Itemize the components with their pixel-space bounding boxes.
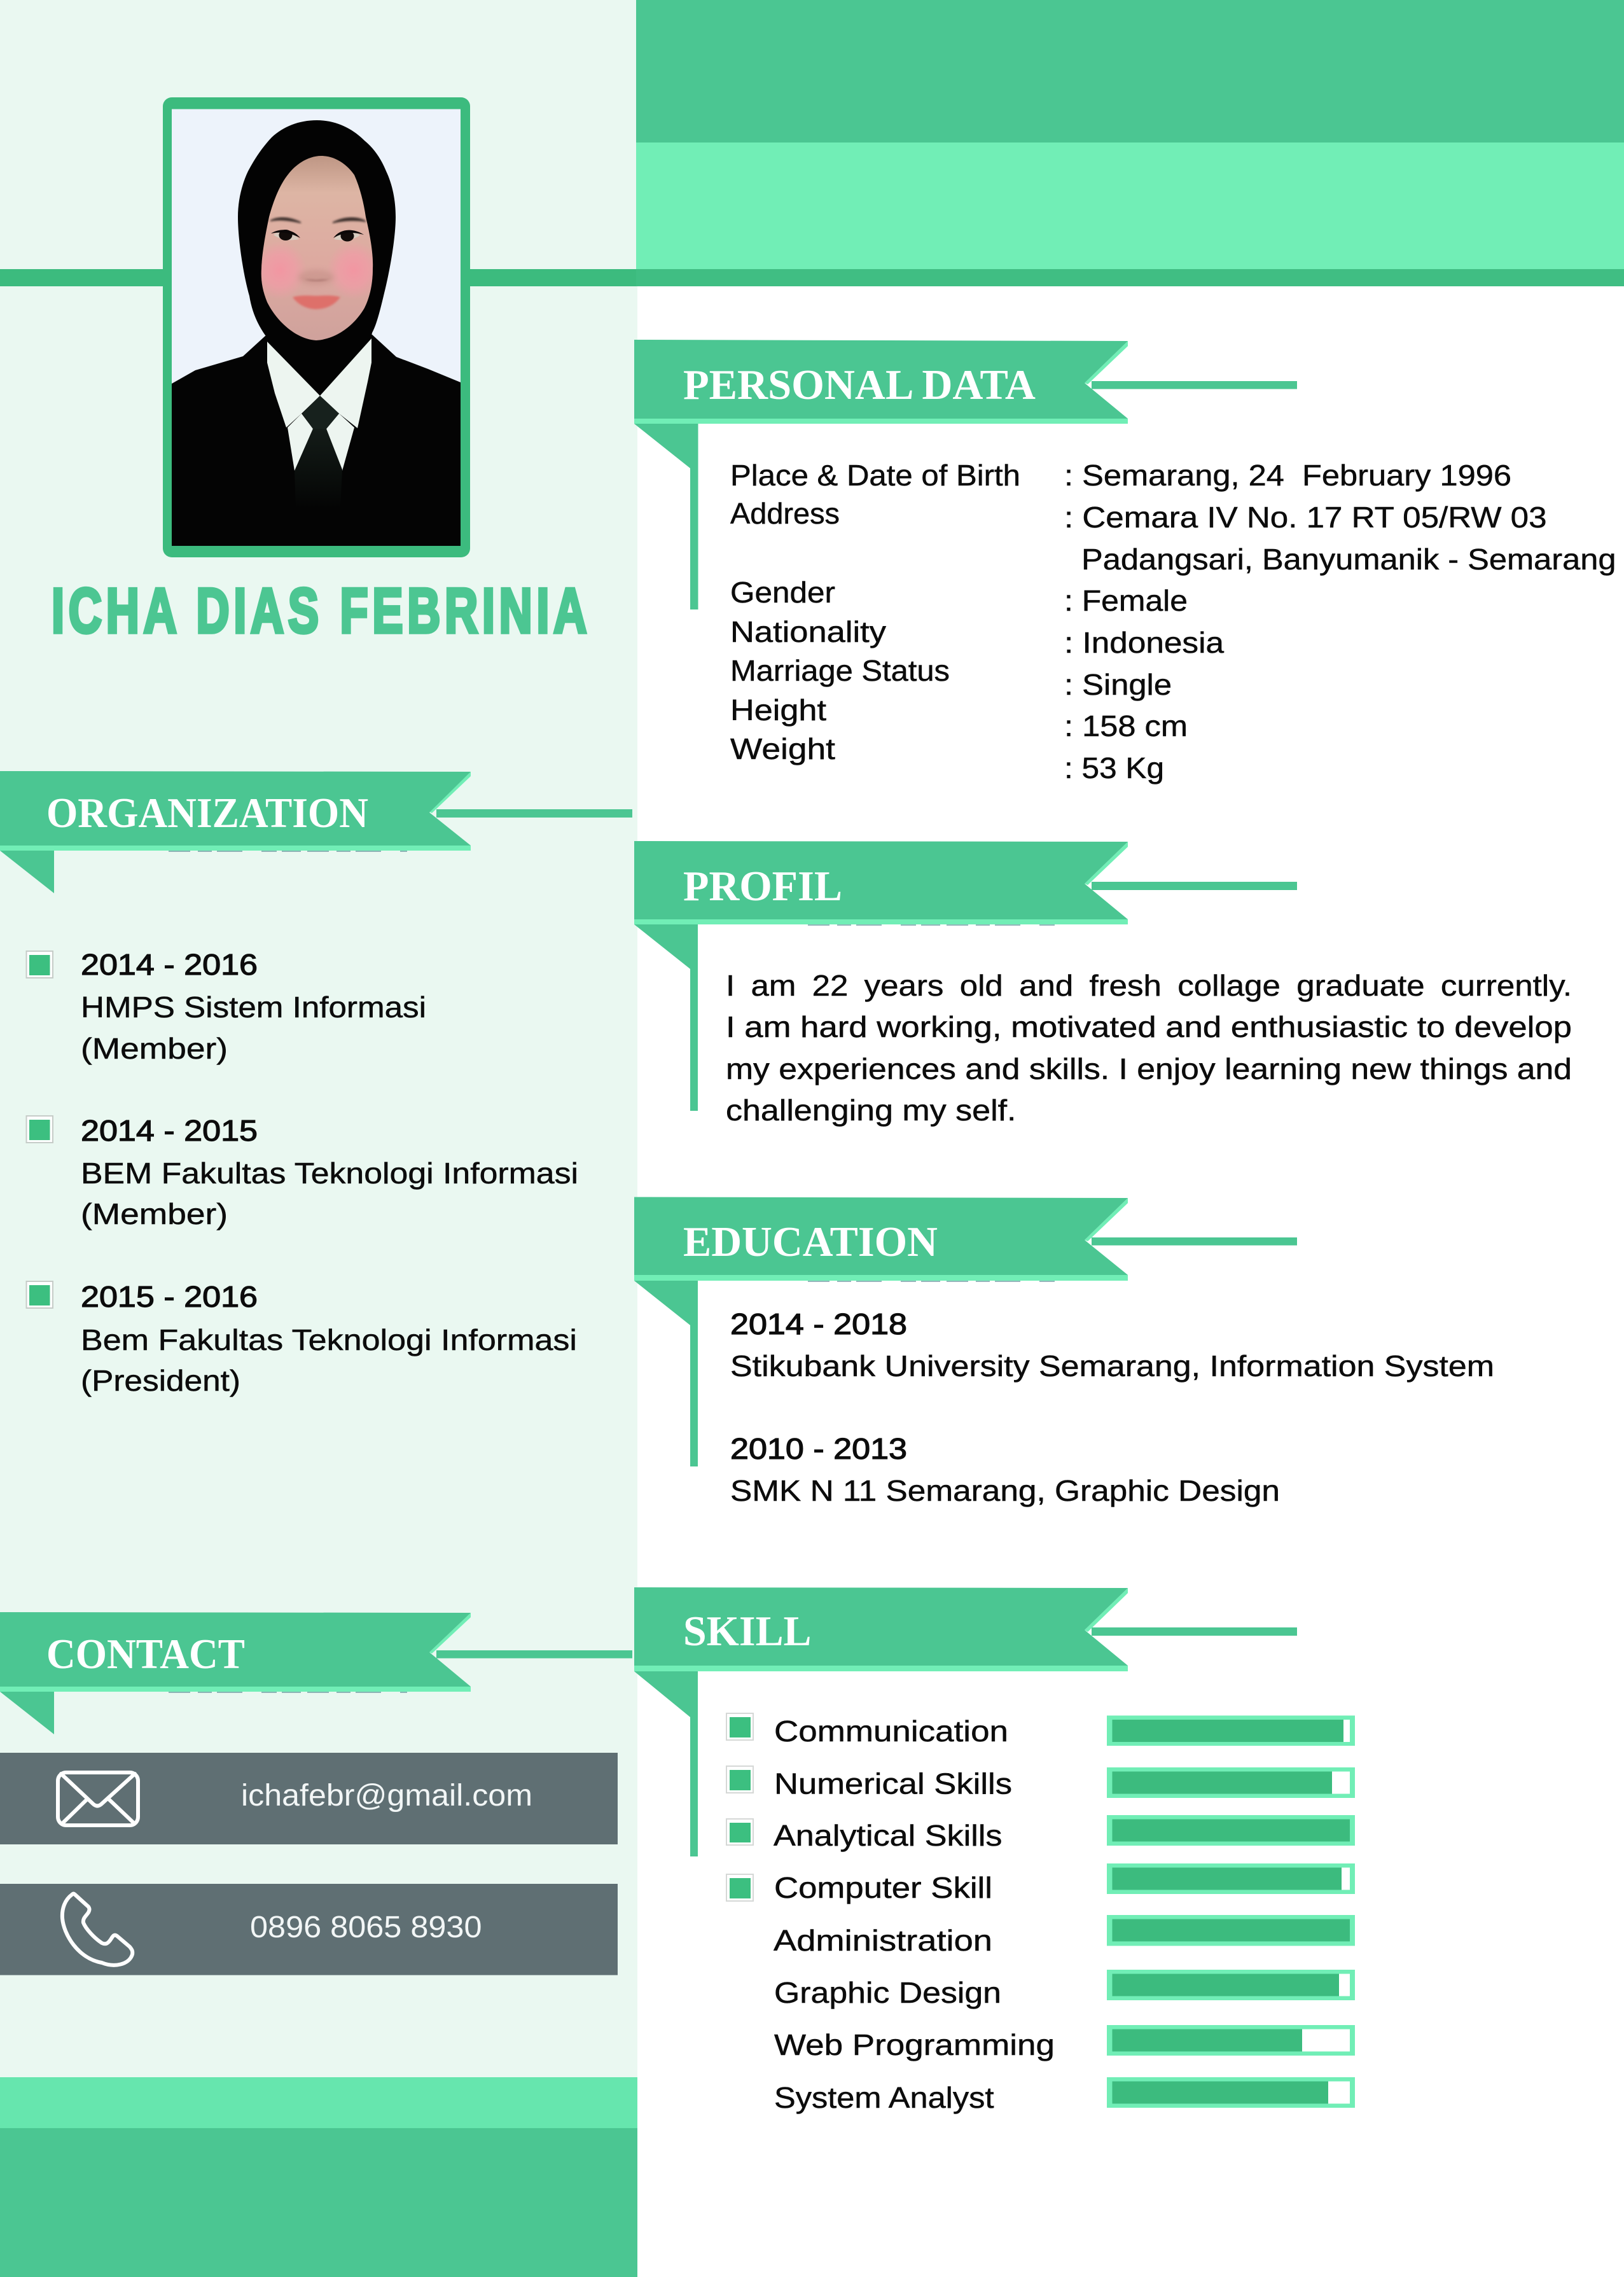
labels: personal data: Weight <box>730 732 835 765</box>
item: organization 2014-2016: (Member) <box>81 1032 228 1065</box>
labels: personal data: Place & Date of Birth <box>730 459 1020 492</box>
photo: portrait in green frame <box>163 97 470 557</box>
labels: skill names: Administration <box>774 1924 992 1957</box>
ribbon: profil heading <box>634 841 1297 1111</box>
labels: personal data: Gender <box>730 576 835 609</box>
labels: skill names: Graphic Design <box>774 1976 1001 2009</box>
labels: personal data: Height <box>730 693 826 727</box>
item: organization 2014-2016: HMPS Sistem Informasi <box>81 991 426 1024</box>
panel: left sidebar background <box>0 0 637 2277</box>
labels: skill names: Communication <box>774 1715 1008 1748</box>
labels: skill names: Web Programming <box>774 2028 1055 2061</box>
item: organization 2014-2015: 2014 - 2015 <box>81 1114 258 1147</box>
bar chart: skill levels <box>1107 1715 1355 2108</box>
labels: personal data <box>730 459 1020 765</box>
item: organization 2015-2016: Bem Fakultas Teknologi Informasi <box>81 1323 577 1356</box>
ribbon: skill heading: SKILL <box>683 1608 812 1655</box>
labels: personal data: Marriage Status <box>730 654 950 687</box>
header line <box>0 269 1624 286</box>
item: organization 2014-2016: 2014 - 2016 <box>81 948 258 981</box>
ribbon: personal data heading: PERSONAL DATA <box>683 361 1036 408</box>
text block: profile paragraph: my experiences and skills. I enjoy learning new things and <box>726 1052 1572 1085</box>
values: personal data: : Semarang, 24 February 1996 <box>1064 459 1511 492</box>
panel: skill <box>634 1587 1355 2114</box>
ribbon: contact heading: CONTACT <box>46 1631 245 1678</box>
labels: skill names: System Analyst <box>774 2081 994 2114</box>
header band: top right <box>636 0 1624 269</box>
text block: profile paragraph <box>726 969 1572 1127</box>
ribbon: education heading: EDUCATION <box>683 1218 938 1265</box>
contact row: email <box>0 1753 618 1844</box>
values: personal data: : Cemara IV No. 17 RT 05/RW 03 <box>1064 501 1547 534</box>
ribbon: education heading <box>634 1197 1297 1466</box>
contact row: phone: 0896 8065 8930 <box>250 1911 482 1944</box>
entry: university <box>730 1307 1494 1382</box>
entry: vocational school: 2010 - 2013 <box>730 1432 907 1465</box>
values: personal data: : Single <box>1064 668 1172 701</box>
labels: skill names <box>774 1715 1055 2114</box>
ribbon: skill heading <box>634 1587 1297 1856</box>
values: personal data: : 53 Kg <box>1064 751 1164 784</box>
contact row: phone <box>0 1884 618 1975</box>
entry: university: 2014 - 2018 <box>730 1307 907 1340</box>
item: organization 2014-2015: (Member) <box>81 1197 228 1230</box>
entry: university: Stikubank University Semarang, Information System <box>730 1349 1494 1382</box>
ribbon: organization heading <box>0 771 632 893</box>
entry: vocational school <box>730 1432 1280 1507</box>
item: organization 2014-2015: BEM Fakultas Teknologi Informasi <box>81 1157 578 1190</box>
name title: ICHA DIAS FEBRINIA <box>52 575 591 646</box>
entry: vocational school: SMK N 11 Semarang, Graphic Design <box>730 1474 1280 1507</box>
values: personal data: : 158 cm <box>1064 709 1188 742</box>
item: organization 2015-2016 <box>27 1280 577 1397</box>
panel: profil <box>634 841 1572 1127</box>
icon: telephone handset <box>62 1893 132 1965</box>
panel: organization <box>0 771 632 1397</box>
ribbon: contact heading <box>0 1612 632 1734</box>
values: personal data: : Female <box>1064 584 1188 617</box>
panel: personal data <box>634 340 1616 784</box>
contact row: email: ichafebr@gmail.com <box>241 1779 532 1813</box>
panel: contact <box>0 1612 632 1975</box>
footer band: bottom left <box>0 2077 637 2277</box>
ribbon: personal data heading <box>634 340 1297 609</box>
bullets: skill markers <box>726 1713 753 1901</box>
values: personal data <box>1064 459 1616 784</box>
item: organization 2015-2016: (President) <box>81 1364 240 1397</box>
ribbon: organization heading: ORGANIZATION <box>46 790 368 837</box>
values: personal data: Padangsari, Banyumanik - Semarang <box>1081 543 1616 576</box>
icon: envelope <box>58 1772 138 1825</box>
text block: profile paragraph: challenging my self. <box>726 1094 1017 1127</box>
labels: skill names: Analytical Skills <box>774 1819 1003 1852</box>
labels: skill names: Numerical Skills <box>774 1767 1012 1800</box>
labels: skill names: Computer Skill <box>774 1871 992 1904</box>
item: organization 2014-2016 <box>27 948 426 1065</box>
item: organization 2015-2016: 2015 - 2016 <box>81 1280 258 1313</box>
text block: profile paragraph: I am 22 years old and fresh collage graduate currently. <box>726 969 1572 1002</box>
text block: profile paragraph: I am hard working, motivated and enthusiastic to develop <box>726 1010 1572 1043</box>
panel: education <box>634 1197 1494 1507</box>
labels: personal data: Nationality <box>730 615 886 648</box>
labels: personal data: Address <box>730 497 840 530</box>
ribbon: profil heading: PROFIL <box>683 863 842 910</box>
values: personal data: : Indonesia <box>1064 626 1224 659</box>
item: organization 2014-2015 <box>27 1114 578 1230</box>
